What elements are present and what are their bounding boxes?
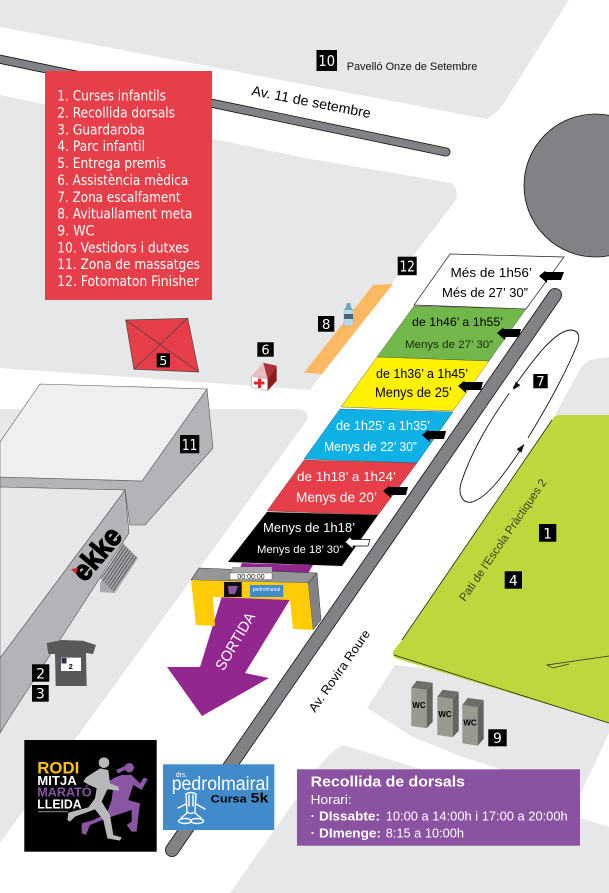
marker 7: 7 <box>536 375 545 390</box>
marker 7 <box>533 374 548 390</box>
start corral: 1h46 to 1h55: de 1h46’ a 1h55’ <box>412 315 503 329</box>
marker 2: 2 <box>36 666 45 682</box>
logo: Rodi Mitja Maratò Lleida <box>24 740 157 852</box>
panel: bib collection: Recollida de dorsals <box>311 774 465 791</box>
logo: Rodi Mitja Maratò Lleida: MITJA <box>37 773 77 788</box>
arrow: corral 4 <box>422 430 446 442</box>
start direction arrow <box>167 563 313 716</box>
marker 4: 4 <box>509 574 518 590</box>
marker 2 <box>32 664 49 682</box>
marker 12: 12 <box>399 258 415 276</box>
WC cabin 2: WC <box>438 710 452 719</box>
marker 10: 10 <box>318 52 335 70</box>
marker 4 <box>505 571 522 590</box>
start arch <box>191 567 321 630</box>
road: Av. 11 de setembre <box>0 58 446 152</box>
stairs <box>100 543 138 593</box>
start corral: 1h18 to 1h24: Menys de 20’ <box>296 489 377 505</box>
start corral: under 1h18: Menys de 18’ 30” <box>257 544 343 556</box>
marker 5: 5 <box>159 353 167 368</box>
start corral: over 1h56: Més de 27’ 30” <box>442 286 528 300</box>
panel: legend: 4. Parc infantil <box>57 139 145 155</box>
marker 1 <box>539 524 556 542</box>
logo: Pedrol Mairal Cursa 5k: Cursa <box>211 793 248 805</box>
panel: legend: 8. Avituallament meta <box>57 207 192 223</box>
logo: Rodi Mitja Maratò Lleida: RODI <box>37 758 79 777</box>
marker 9 <box>488 729 507 747</box>
refreshment strip <box>304 284 393 374</box>
panel: legend <box>45 71 212 300</box>
marker 3: 3 <box>36 687 45 703</box>
WC cabin 3: WC <box>463 718 477 727</box>
start corral: 1h18 to 1h24: de 1h18’ a 1h24’ <box>297 469 396 484</box>
marker 8 <box>318 316 334 333</box>
street label: Av. 11 de setembre: Av. 11 de setembre <box>250 82 372 121</box>
marker 5 <box>157 353 170 368</box>
panel: legend: 10. Vestidors i dutxes <box>57 240 189 256</box>
marker 1: 1 <box>543 526 552 542</box>
arrow: corral 2 <box>497 328 521 340</box>
WC cabins <box>411 681 484 746</box>
start corral: 1h36 to 1h45: Menys de 25’ <box>375 385 452 400</box>
warm-up track <box>460 330 579 502</box>
runner: grey <box>67 757 122 841</box>
start corral: over 1h56: Més de 1h56’ <box>450 265 532 280</box>
marker 6: 6 <box>261 344 270 358</box>
panel: bib collection: · DImenge: <box>311 826 381 841</box>
marker 11: 11 <box>182 436 197 454</box>
building 11 <box>0 384 213 525</box>
marker 3 <box>32 685 49 703</box>
arrow: corral 1 <box>539 271 564 283</box>
panel: bib collection: Horari: <box>311 792 352 807</box>
logo: Pedrol Mairal Cursa 5k: drs. <box>176 772 187 779</box>
panel: legend: 12. Fotomaton Finisher <box>57 274 199 290</box>
t-shirt icon: 2 <box>69 662 73 671</box>
green schoolyard <box>393 415 609 723</box>
logo: Pedrol Mairal Cursa 5k: pedrolmairal <box>172 774 269 795</box>
road: Av. Rovira Roure <box>172 295 555 850</box>
panel: bib collection: 10:00 a 14:00h i 17:00 a 20:00h <box>386 809 568 824</box>
marker 6 <box>257 342 274 358</box>
start corral: under 1h18: Menys de 1h18’ <box>263 521 355 535</box>
water bottle icon <box>344 303 353 326</box>
start corral: 1h36 to 1h45: de 1h36’ a 1h45’ <box>376 367 468 381</box>
label: Pati de l'Escola Pràctiques 2: Pati de l'Escola Pràctiques 2 <box>458 477 549 604</box>
street label: Av. Rovira Roure: Av. Rovira Roure <box>306 627 373 715</box>
logo: Pedrol Mairal Cursa 5k <box>163 764 274 830</box>
building ekke <box>0 487 129 733</box>
marker 9: 9 <box>493 731 502 747</box>
panel: legend: 2. Recollida dorsals <box>57 106 175 122</box>
panel: bib collection: · DIssabte: <box>311 809 380 824</box>
panel: legend: 7. Zona escalfament <box>57 190 181 206</box>
label: SORTIDA: SORTIDA <box>212 610 259 674</box>
arrow: corral 6 <box>345 537 370 549</box>
t-shirt icon <box>47 640 96 686</box>
prize tent <box>126 318 199 372</box>
race clock: 00:00:00 <box>237 574 265 581</box>
panel: legend: 6. Assistència mèdica <box>57 173 188 189</box>
start corral: 1h25 to 1h35: de 1h25’ a 1h35’ <box>336 419 430 433</box>
WC cabin 1: WC <box>412 701 426 710</box>
logo: Pedrol Mairal Cursa 5k: 5k <box>251 789 269 805</box>
arrow: corral 3 <box>458 381 483 393</box>
panel: bib collection: 8:15 a 10:00h <box>386 826 464 841</box>
label: Pavelló Onze de Setembre: Pavelló Onze de Setembre <box>347 61 477 73</box>
ekke logo: ekke <box>66 521 129 587</box>
start arch: pedrolmairal <box>253 587 280 593</box>
panel: legend: 11. Zona de massatges <box>57 257 200 273</box>
panel: legend: 1. Curses infantils <box>57 89 166 105</box>
start corral: 1h46 to 1h55 <box>377 306 526 361</box>
panel: legend: 5. Entrega premis <box>57 156 166 172</box>
panel: legend: 9. WC <box>57 224 94 240</box>
marker 8: 8 <box>322 317 330 333</box>
panel: legend: 3. Guardaroba <box>57 122 145 138</box>
medical tent <box>252 363 277 391</box>
panel: bib collection <box>297 769 580 846</box>
start corral: 1h25 to 1h35: Menys de 22’ 30” <box>324 440 417 454</box>
icon: tooth mascot <box>178 792 205 824</box>
start corral: 1h25 to 1h35 <box>304 409 453 463</box>
logo: Rodi Mitja Maratò Lleida: MARATÓ <box>37 785 92 800</box>
start corral: 1h36 to 1h45 <box>341 357 489 411</box>
runner: purple <box>82 763 148 835</box>
start corral: over 1h56 <box>414 254 564 309</box>
start corral: under 1h18 <box>228 512 378 566</box>
start corral: 1h46 to 1h55: Menys de 27’ 30” <box>405 339 493 351</box>
roundabout <box>524 114 609 257</box>
start corral: 1h18 to 1h24 <box>267 460 417 515</box>
arrow: corral 5 <box>383 486 408 498</box>
logo: Rodi Mitja Maratò Lleida: LLEIDA <box>37 796 82 811</box>
